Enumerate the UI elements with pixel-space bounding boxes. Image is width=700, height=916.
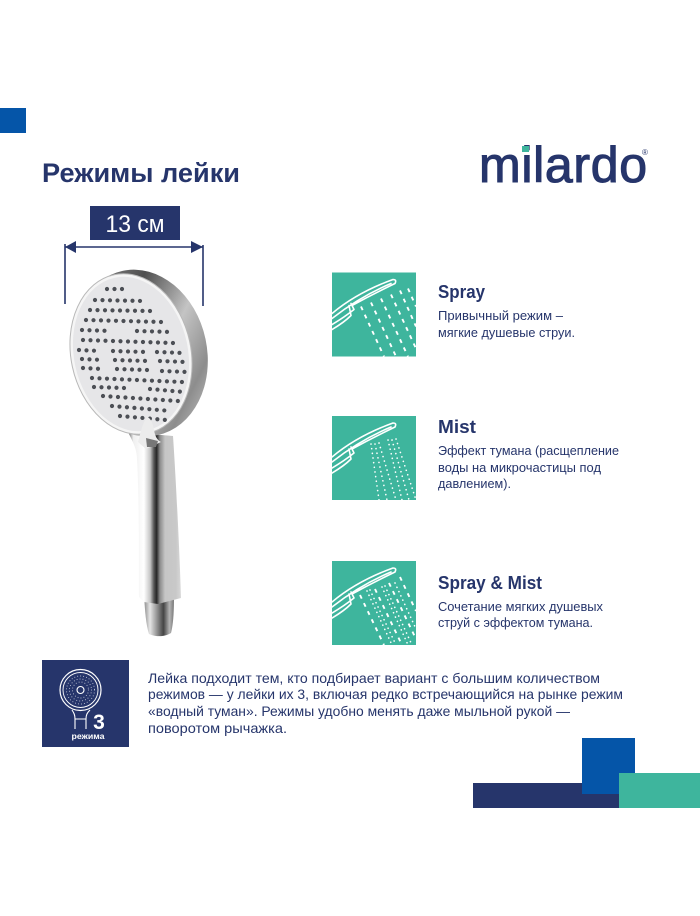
- logo: milardo: ®: [642, 148, 648, 157]
- mode text: Spray: мягкие душевые струи.: [438, 325, 575, 340]
- decorative corner blocks: [473, 738, 700, 808]
- rim: [57, 257, 223, 449]
- drops: [361, 288, 416, 356]
- mist: [371, 439, 416, 500]
- neck joint: [138, 417, 161, 449]
- face ring: [55, 262, 207, 446]
- mode text: Spray: Spray: [438, 282, 485, 302]
- mode text: Spray and Mist: [438, 573, 603, 630]
- mode text: Mist: давлением).: [438, 476, 511, 491]
- handle: [128, 432, 181, 604]
- face: [59, 266, 203, 442]
- description text: Лейка подходит тем, кто подбирает вариант с большим количеством: [148, 670, 600, 686]
- mode text: Spray: Привычный режим –: [438, 308, 564, 323]
- icon: spray mode: [332, 272, 416, 356]
- description text: «водный туман». Режимы удобно менять даже мыльной рукой —: [148, 703, 570, 719]
- mode text: Spray and Mist: Spray & Mist: [438, 573, 542, 593]
- description text: поворотом рычажка.: [148, 720, 287, 736]
- holes: [79, 289, 188, 420]
- corner accent square: [0, 108, 26, 133]
- icon: shower head front: [60, 670, 101, 729]
- drops: [360, 577, 416, 645]
- dimension: 13 cm: [65, 206, 203, 306]
- mode text: Spray and Mist: струй с эффектом тумана.: [438, 615, 593, 630]
- title: Режимы лейки: [42, 158, 240, 188]
- mode text: Mist: воды на микрочастицы под: [438, 460, 601, 475]
- badge: 3 modes: режима: [72, 731, 105, 741]
- mode text: Mist: Mist: [438, 417, 476, 437]
- description text: [148, 670, 623, 736]
- shower outline: [332, 568, 396, 618]
- description text: режимов — у лейки их 3, включая редко встречающийся на рынке режим: [148, 686, 623, 702]
- icon: spray and mist mode: [332, 561, 416, 645]
- shower outline: [332, 280, 396, 330]
- shower head product photo: [55, 257, 223, 636]
- mode text: Mist: Эффект тумана (расщепление: [438, 443, 619, 458]
- shower outline: [332, 423, 396, 473]
- nozzle: [144, 594, 174, 636]
- mode text: Mist: [438, 417, 619, 491]
- mist: [367, 583, 416, 645]
- mode text: Spray: [438, 282, 575, 340]
- mode text: Spray and Mist: Сочетание мягких душевых: [438, 599, 603, 614]
- icon: mist mode: [332, 416, 416, 500]
- logo: milardo: milardo: [479, 137, 647, 193]
- dimension: 13 cm: 13 см: [106, 211, 164, 238]
- badge: 3 modes: 3: [93, 711, 105, 734]
- badge: 3 modes: [42, 660, 129, 747]
